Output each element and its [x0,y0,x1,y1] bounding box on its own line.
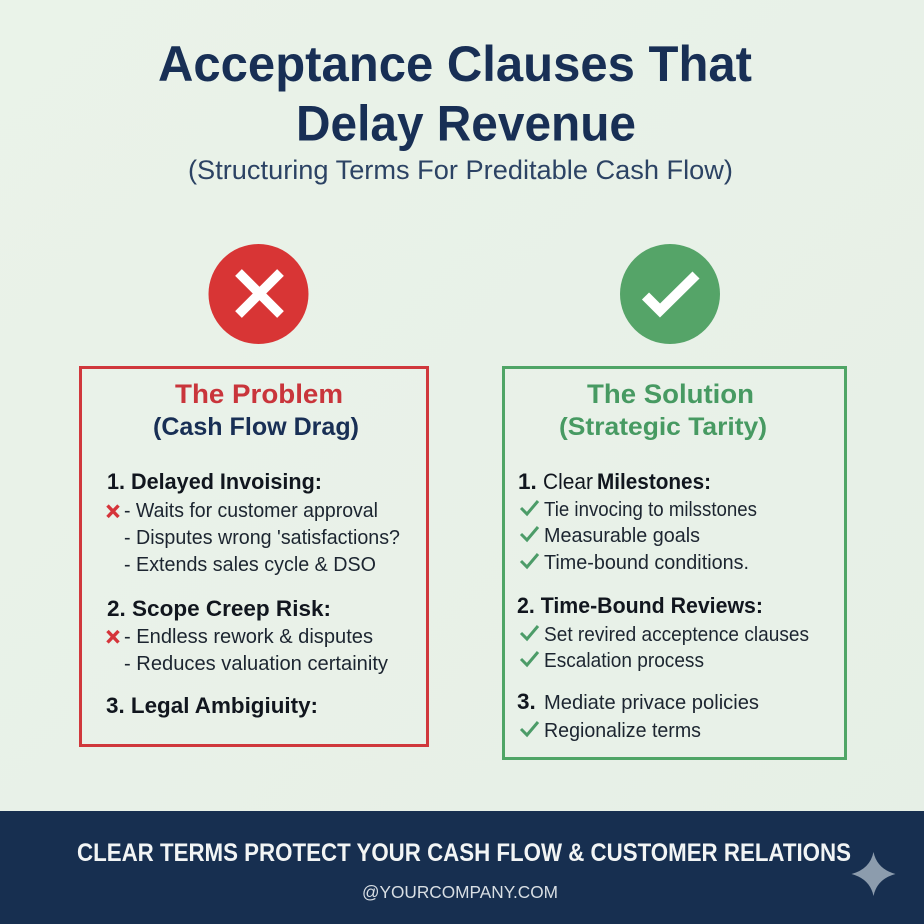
solution item 2: Escalation process [544,649,704,672]
problem item 2 [107,596,389,675]
solution item 1: Time-bound conditions. [544,551,749,574]
solution item 2: Set revired acceptence clauses [544,623,809,646]
icon: green check circle [620,244,720,344]
problem heading: The Problem [175,379,343,409]
icon: red cross circle [208,244,308,344]
problem item 2: 2. Scope Creep Risk: [107,596,331,621]
problem item 1: - Disputes wrong 'satisfactions? [124,526,400,549]
solution item 1: Tie invocing to milsstones [544,498,757,521]
panel: the solution [504,368,846,758]
solution item 3 [517,689,759,742]
problem item 2: - Endless rework & disputes [124,625,373,648]
problem item 3: 3. Legal Ambigiuity: [106,693,318,718]
icon: sparkle star [852,852,896,896]
solution item 3: 3. [517,689,536,714]
solution heading: The Solution [587,379,754,409]
problem item 1: 1. Delayed Invoising: [107,469,322,494]
title: Delay Revenue [296,96,636,152]
footer tagline: CLEAR TERMS PROTECT YOUR CASH FLOW & CUSTOMER RELATIONS [77,839,851,867]
solution item 2: 2. Time-Bound Reviews: [517,593,763,618]
solution item 1: Measurable goals [544,524,700,547]
footer banner [0,811,924,924]
solution item 1: Clear [543,469,593,494]
solution item 1 [518,469,757,574]
title: Acceptance Clauses That [158,36,752,92]
solution item 3: Mediate privace policies [544,691,759,714]
solution subheading: (Strategic Tarity) [559,413,767,441]
title [158,36,752,152]
panel: the problem [80,368,428,746]
subtitle: (Structuring Terms For Preditable Cash Flow) [188,155,733,185]
problem item 1: - Extends sales cycle & DSO [124,553,376,576]
footer website: @YOURCOMPANY.COM [362,882,558,902]
problem item 2: - Reduces valuation certainity [124,652,389,675]
solution item 1: 1. [518,469,537,494]
problem item 1: - Waits for customer approval [124,499,378,522]
solution item 1: Milestones: [597,469,711,494]
solution item 2 [517,593,809,672]
problem item 1 [107,469,400,576]
problem subheading: (Cash Flow Drag) [153,413,359,441]
solution item 3: Regionalize terms [544,719,701,742]
